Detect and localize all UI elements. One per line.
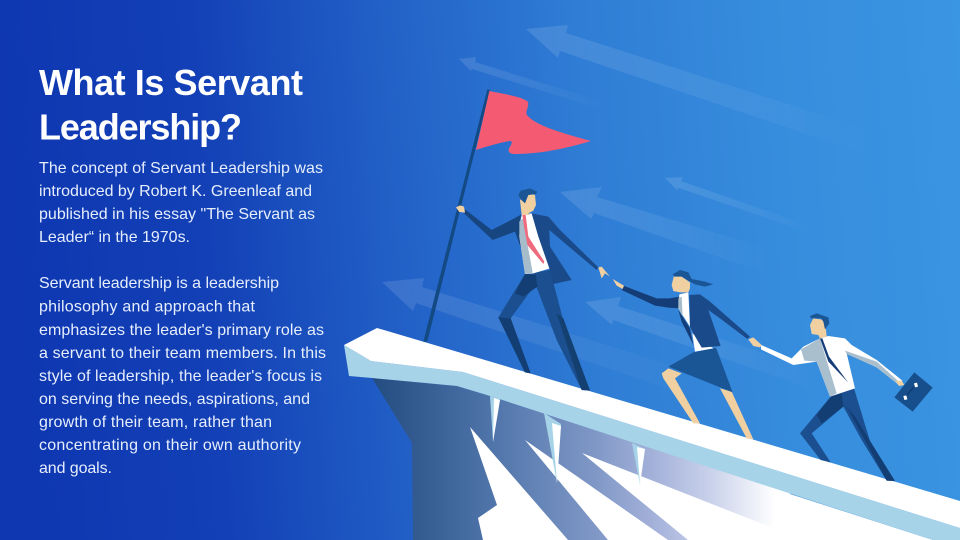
- figure: woman: [613, 270, 753, 439]
- text block: definition: and goals.: [39, 460, 112, 477]
- background arrows: [382, 25, 875, 397]
- figure: man with briefcase: [748, 313, 933, 481]
- title: Leadership?: [39, 106, 242, 148]
- text block: origin of the concept: Leader“ in the 1970s.: [39, 229, 190, 246]
- text block: definition: emphasizes the leader's primary role as: [39, 322, 324, 339]
- cliff: [344, 328, 960, 540]
- figure: leader with flag: [456, 188, 610, 391]
- text block: definition: on serving the needs, aspirations, and: [39, 391, 310, 408]
- title: [39, 62, 303, 148]
- text block: definition: style of leadership, the leader's focus is: [39, 368, 322, 385]
- text block: origin of the concept: [39, 160, 323, 246]
- text block: definition: Servant leadership is a leadership: [39, 275, 279, 292]
- text block: origin of the concept: published in his essay "The Servant as: [39, 206, 315, 223]
- text block: origin of the concept: The concept of Servant Leadership was: [39, 160, 323, 177]
- text block: definition: philosophy and approach that: [39, 298, 256, 316]
- text block: definition: a servant to their team members. In this: [39, 345, 326, 362]
- flag: [423, 89, 591, 342]
- title: What Is Servant: [39, 62, 303, 103]
- text block: definition: concentrating on their own authority: [39, 437, 301, 454]
- text block: definition: [39, 275, 326, 477]
- text block: definition: growth of their team, rather than: [39, 414, 272, 431]
- text block: origin of the concept: introduced by Robert K. Greenleaf and: [39, 183, 312, 200]
- icon: briefcase: [894, 372, 933, 412]
